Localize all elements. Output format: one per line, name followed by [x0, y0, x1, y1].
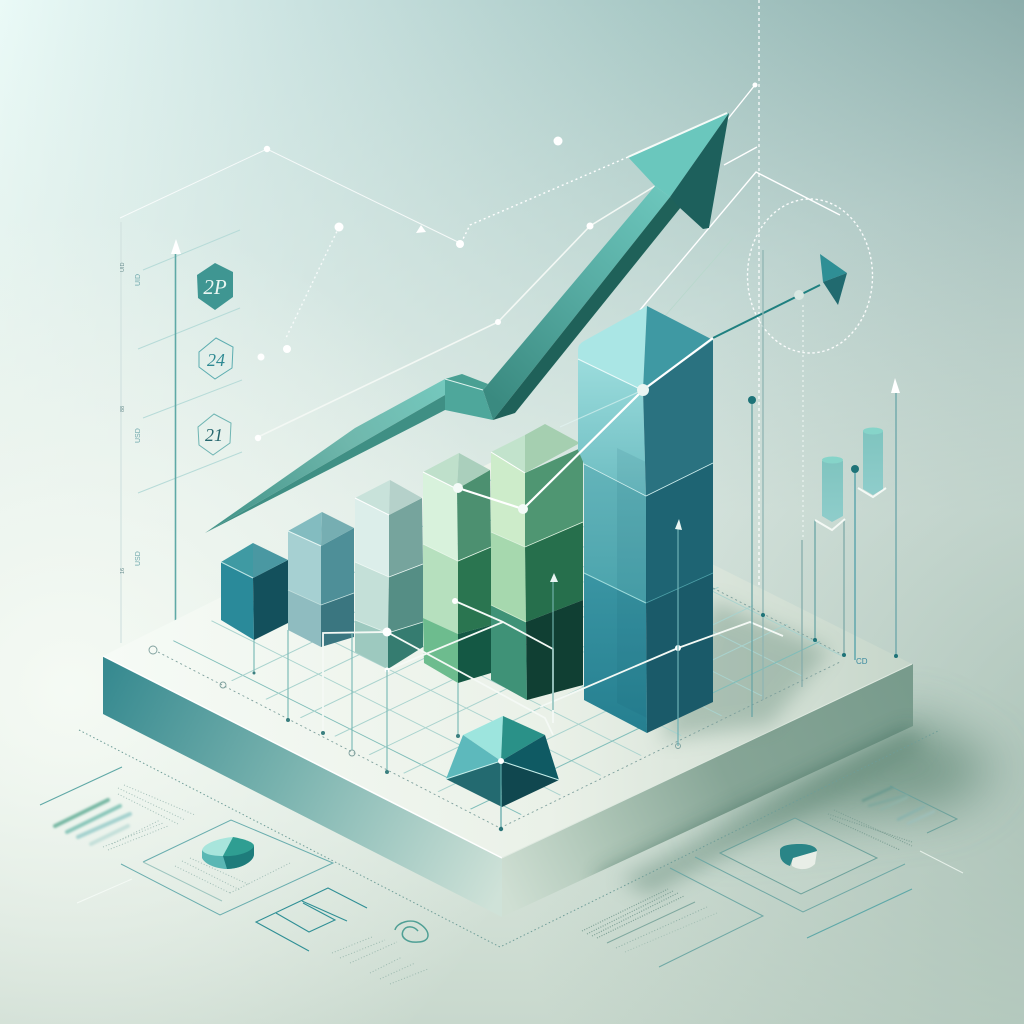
background line chart	[120, 0, 872, 640]
left axis scales and guides: 88	[120, 406, 126, 412]
platform top face	[103, 458, 912, 858]
badge: 2P: 2P	[203, 275, 227, 299]
left axis scales and guides: UID	[120, 262, 126, 272]
bar 4	[423, 453, 491, 683]
platform	[103, 458, 913, 917]
decor: lower right card	[695, 818, 912, 938]
gem marker	[446, 716, 559, 831]
pie small	[780, 844, 817, 869]
platform grid	[172, 480, 842, 815]
decor: lower left pie card	[121, 820, 333, 915]
right line chart with arrow	[453, 254, 847, 514]
floor line chart	[323, 598, 783, 735]
decor: lower left panel	[40, 767, 195, 903]
decor: dotted text blocks	[332, 937, 428, 984]
platform dashed inset and markers: CD	[856, 657, 868, 666]
arrow head	[628, 113, 729, 197]
arrow shaft	[483, 186, 670, 420]
right side pins	[748, 250, 900, 717]
bar shadow on platform	[660, 600, 830, 740]
bar 6	[578, 306, 713, 733]
decor: upper right panel	[828, 786, 963, 873]
badge: 21	[198, 414, 231, 455]
badge: 2P	[197, 263, 233, 310]
left axis scales and guides: USD	[135, 551, 142, 566]
small cylinder right	[858, 428, 886, 497]
badge: 24	[199, 338, 233, 379]
bar 2	[288, 512, 354, 647]
bar 3	[355, 480, 423, 669]
badge: 24: 24	[207, 350, 225, 370]
drop lines and arrows on bars	[252, 519, 682, 774]
vertical axis arrow	[171, 239, 181, 641]
platform right face	[502, 664, 913, 917]
ground shadow	[620, 715, 1000, 895]
bar 5	[491, 424, 583, 700]
decor: lower right text lines	[582, 868, 763, 967]
left axis scales and guides: 16	[120, 568, 126, 574]
platform left face	[103, 656, 502, 917]
decor: E-shaped table sketch	[256, 888, 367, 951]
platform dashed inset and markers	[149, 588, 868, 828]
pie	[202, 837, 254, 869]
arrow knee	[445, 374, 488, 390]
badge: 21: 21	[205, 425, 223, 445]
arrow tail	[205, 379, 445, 533]
bar 1	[221, 543, 288, 640]
decor: spiral icon	[395, 921, 428, 942]
left axis scales and guides: USD	[135, 428, 142, 443]
big arrow	[205, 113, 729, 533]
left axis scales and guides	[120, 222, 242, 643]
left axis scales and guides: UID	[135, 274, 142, 286]
ground dashed outline	[79, 730, 940, 947]
small cylinder left	[815, 456, 845, 530]
